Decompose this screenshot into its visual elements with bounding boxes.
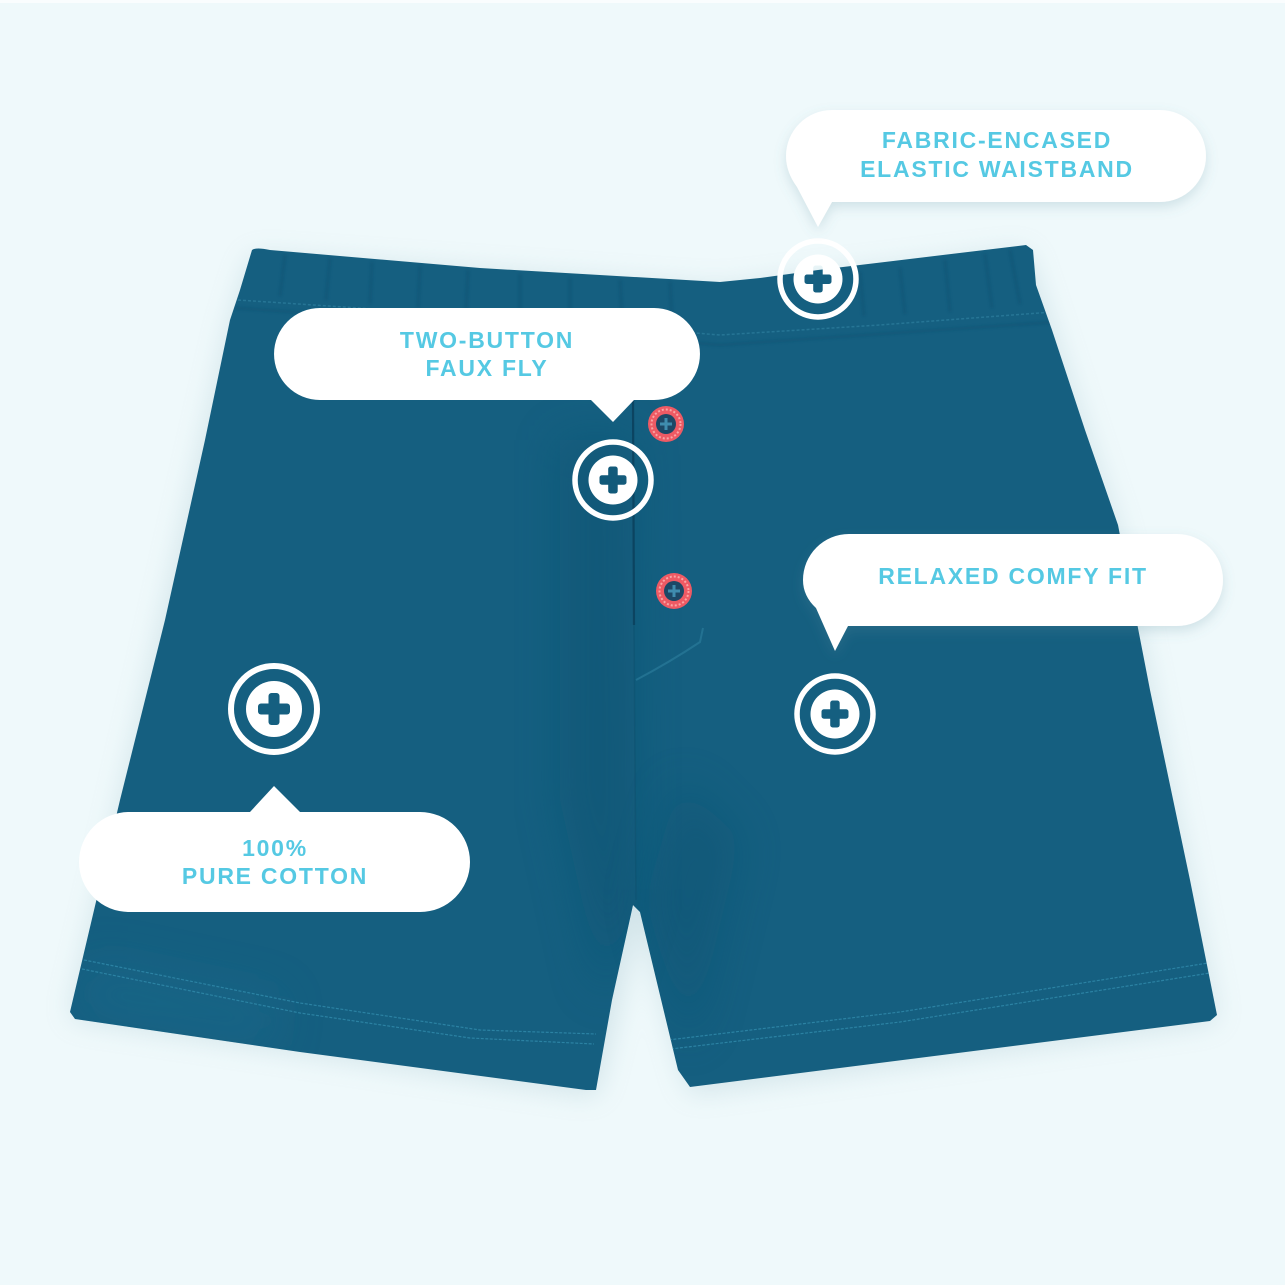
hotspot: cotton	[231, 666, 317, 752]
hotspot: fit	[797, 676, 873, 752]
hotspot: fly	[575, 442, 651, 518]
callout: two-button faux fly: FAUX FLY	[425, 355, 549, 381]
waistband gathers	[280, 250, 1020, 322]
callout: fabric-encased elastic waistband: FABRIC-ENCASED	[882, 127, 1112, 153]
callout: fabric-encased elastic waistband: ELASTIC WAISTBAND	[860, 156, 1134, 182]
product: blue shorts	[70, 245, 1217, 1096]
waistband stitching	[238, 300, 1052, 335]
callout: relaxed comfy fit: RELAXED COMFY FIT	[878, 563, 1148, 589]
fly placket	[633, 400, 634, 625]
callout: two-button faux fly	[274, 308, 700, 422]
callout: two-button faux fly: TWO-BUTTON	[400, 327, 574, 353]
hotspot: waistband	[780, 241, 856, 317]
callout: relaxed comfy fit	[803, 534, 1223, 651]
callout: 100% pure cotton	[79, 786, 470, 912]
callout: fabric-encased elastic waistband	[786, 110, 1206, 227]
hem stitching left	[82, 960, 1210, 1050]
lower button	[656, 573, 692, 609]
upper button	[648, 406, 684, 442]
callout: 100% pure cotton: PURE COTTON	[182, 863, 368, 889]
callout: 100% pure cotton: 100%	[242, 835, 308, 861]
hem stitching right	[660, 963, 1208, 1041]
fabric shading	[75, 868, 656, 1046]
